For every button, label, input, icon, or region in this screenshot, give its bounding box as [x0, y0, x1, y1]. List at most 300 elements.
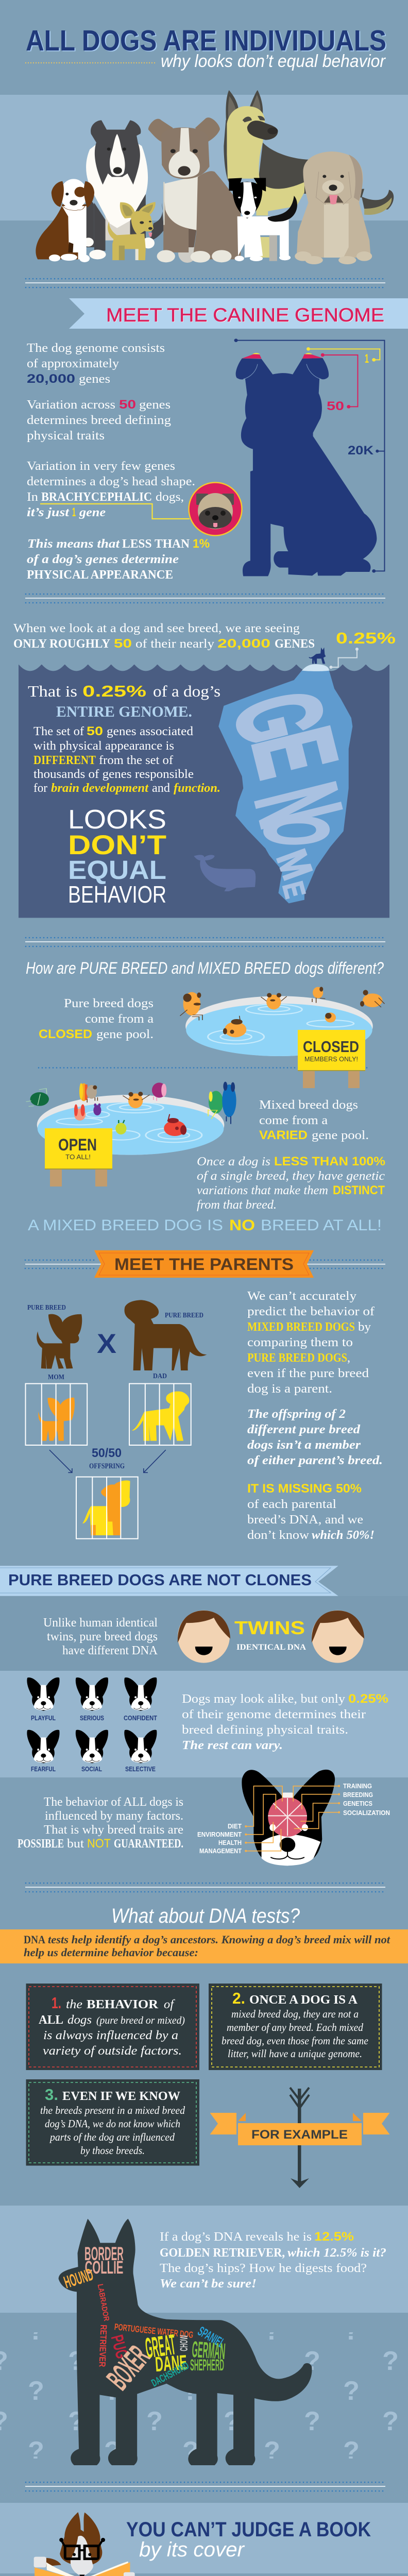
statement: no breed at all [28, 1217, 382, 1234]
background question marks: ? [382, 2406, 399, 2436]
icon: twin faces [27, 1611, 364, 1763]
text block: behavior influences: POSSIBLE [18, 1837, 64, 1851]
card 1: BEHAVIOR [87, 1998, 159, 2011]
card 1: the [66, 1998, 82, 2011]
text block: 12.5 percent: 12.5% [314, 2230, 354, 2244]
labels: factors: BREEDING [343, 1791, 373, 1799]
background question marks: ? [304, 2406, 320, 2436]
orange and tan dogs [79, 1083, 97, 1103]
text block: mixed breed: Once a dog is [197, 1155, 270, 1168]
text block: mixed breed: from that breed. [197, 1198, 277, 1212]
arrows [49, 1450, 166, 1472]
text block: less than 1 percent: 1% [193, 537, 210, 551]
text block: mixed breed: VARIED [259, 1128, 308, 1142]
band: dna intro: help us determine behavior because: [24, 1946, 198, 1959]
text block: less than 1 percent: of a dog’s genes determine [27, 553, 179, 566]
iceberg word: GENOME: E [276, 878, 312, 902]
background question marks: ? [264, 2376, 280, 2406]
text block: entire genome: function. [174, 782, 220, 795]
card 3: by those breeds. [80, 2144, 145, 2157]
text block: parents: even if the pure breed [247, 1367, 369, 1380]
breed word cloud: RETRIEVER [97, 2325, 109, 2367]
twin right [312, 1611, 364, 1663]
card 3: the breeds present in a mixed breed [40, 2104, 185, 2116]
labels: pure breed, mom, dad [27, 1304, 203, 1381]
heading: what about dna tests: What about DNA tests? [111, 1905, 300, 1927]
label: twins [234, 1617, 306, 1652]
labels: temperaments: FEARFUL [31, 1765, 56, 1773]
text block: behavior influences: GUARANTEED. [114, 1837, 183, 1851]
labels: temperaments: SERIOUS [80, 1714, 104, 1722]
text block: entire genome: 0.25% [82, 682, 146, 700]
text block: genome facts: genes [79, 372, 110, 386]
statement: no breed at all: NO [229, 1217, 255, 1234]
divider [25, 938, 386, 946]
card 1: (pure breed or mixed) [96, 2015, 185, 2026]
text block: entire genome: for [33, 782, 47, 795]
divider [25, 2482, 386, 2491]
labels: pure breed, mom, dad: PURE BREED [27, 1304, 66, 1312]
illustration: dog reading a book [34, 2512, 135, 2576]
cage: dad [129, 1384, 191, 1445]
cross sign: X [97, 1329, 116, 1359]
cage: offspring [76, 1477, 138, 1539]
dog: collie [83, 120, 164, 259]
iceberg word: GENOME: G [209, 680, 349, 754]
text block: closed pool: CLOSED [39, 1027, 92, 1041]
icon: small dog on iceberg [309, 648, 326, 664]
callout line: 0.25 [329, 648, 359, 669]
purple dog [93, 1104, 101, 1115]
sign: open to all: TO ALL! [65, 1153, 91, 1161]
text block: parents: IT IS MISSING 50% [247, 1482, 362, 1496]
text block: mixed breed: DISTINCT [333, 1183, 385, 1197]
background question marks: ? [68, 2406, 84, 2436]
heading: you can't judge a book [126, 2518, 371, 2561]
banner: meet the parents [94, 1250, 314, 1278]
text block: parents [247, 1290, 383, 1542]
divider segments beside banner [25, 1260, 386, 1268]
card 1: variety of outside factors. [43, 2044, 182, 2058]
dog tumbling [360, 990, 384, 1007]
label: 50/50 offspring: 50/50 [92, 1446, 122, 1460]
background question marks: ? [224, 2406, 240, 2436]
background question marks: ? [264, 2316, 280, 2346]
text block: only roughly 50: of their nearly [135, 637, 214, 651]
label: 50: 50 [327, 399, 344, 413]
silhouette: mom chihuahua [37, 1314, 82, 1369]
text block: genome facts: 1 [72, 505, 76, 519]
text block: only roughly 50: ONLY ROUGHLY [13, 637, 110, 651]
labels: temperaments: PLAYFUL [31, 1714, 56, 1722]
background question marks: ? [28, 2376, 44, 2406]
slogan: looks don't equal behavior: EQUAL [68, 855, 166, 885]
text block: genome facts: Variation across [27, 398, 115, 412]
background question marks: ? [182, 2376, 199, 2406]
breed word cloud: CHOW [178, 2335, 190, 2351]
panel: iceberg [19, 665, 389, 918]
background band: hero [0, 95, 408, 221]
illustration: open pool [26, 1082, 236, 1155]
text block: parents: dog is a parent. [247, 1382, 332, 1396]
text block: look alike: 0.25% [348, 1692, 388, 1706]
background question marks: ? [146, 2406, 163, 2436]
dotted rule [39, 1067, 369, 1069]
text block: genome facts: gene [79, 506, 106, 519]
sign: open to all [45, 1128, 112, 1187]
text block: closed pool [39, 997, 154, 1041]
text block: behavior influences: influenced by many factors. [45, 1809, 183, 1823]
text block: closed pool: gene pool. [96, 1028, 154, 1041]
labels: factors: SOCIALIZATION [343, 1809, 390, 1817]
breed word cloud: LABRADOR [96, 2283, 111, 2321]
breed word cloud: GERMAN [191, 2336, 226, 2364]
card 2: litter, will have a unique genome. [228, 2047, 362, 2060]
ribbon: for example: FOR EXAMPLE [251, 2128, 348, 2142]
icon: terrier head with brain [242, 1770, 340, 1866]
background band: book [0, 2503, 408, 2573]
breed word cloud: DACHSHUND [149, 2360, 191, 2389]
text block: genome facts: Variation in very few genes [27, 460, 175, 473]
illustration: mixed breed dog silhouette [59, 2219, 312, 2465]
text block: less than 1 percent [27, 537, 210, 582]
labels: pure breed, mom, dad: PURE BREED [165, 1312, 203, 1319]
label: 0.25 percent: 0.25% [336, 629, 396, 647]
card 3: EVEN IF WE KNOW [62, 2090, 180, 2103]
text block: parents: breed’s DNA, and we [247, 1513, 363, 1527]
labels: temperaments: SOCIAL [81, 1765, 102, 1773]
banner: meet the canine genome: MEET THE CANINE GENOME [107, 305, 385, 326]
text block: only roughly 50: 50 [114, 637, 132, 651]
labels: factors [197, 1782, 390, 1855]
text block: genome facts: genes [139, 398, 171, 412]
breed word cloud: COLLIE [85, 2258, 123, 2278]
heading: you can't judge a book: YOU CAN’T JUDGE A BOOK [126, 2518, 371, 2541]
green dog tumbling [26, 1089, 49, 1106]
text block: parents: PURE BREED DOGS [247, 1351, 347, 1365]
labels: factors: DIET [228, 1822, 242, 1830]
text block: entire genome: That is [28, 682, 77, 700]
text block: look alike: Dogs may look alike, but only [182, 1692, 345, 1706]
text block: entire genome: 50 [87, 724, 103, 738]
silhouette: dad [125, 1300, 207, 1370]
bracket: 20K [234, 338, 384, 573]
card 2 [209, 1984, 382, 2070]
breed word cloud: SPANIEL [195, 2324, 227, 2351]
text block: parents: of either parent’s breed. [247, 1454, 383, 1467]
text block: less than 1 percent: PHYSICAL APPEARANCE [27, 568, 173, 582]
sign: closed members only: CLOSED [303, 1038, 359, 1056]
divider [25, 1883, 386, 1892]
cage: mom [25, 1384, 87, 1445]
card 2: ONCE A DOG IS A [249, 1993, 358, 2007]
labels: pure breed, mom, dad: MOM [48, 1374, 64, 1381]
text block: less than 1 percent: LESS THAN [122, 537, 190, 551]
band: dna intro [0, 1929, 408, 1963]
text block: genome facts: determines breed defining [27, 414, 171, 427]
text block: entire genome: and [152, 782, 170, 795]
text block: genome facts: 50 [119, 398, 136, 412]
text block: closed pool: Pure breed dogs [64, 997, 154, 1010]
label: 50/50 offspring: OFFSPRING [89, 1462, 125, 1470]
breed word cloud: SHEPHERD [190, 2356, 224, 2375]
text block: less than 1 percent: This means that [27, 537, 120, 551]
label: twins: TWINS [234, 1617, 305, 1638]
breed word cloud: BORDER [84, 2244, 124, 2265]
card 1: dogs [67, 2013, 92, 2027]
text block: 12.5 percent: If a dog’s DNA reveals he is [160, 2230, 312, 2244]
label: 20K: 20K [348, 444, 374, 457]
background question marks: ? [182, 2316, 199, 2346]
background question marks: ? [104, 2376, 121, 2406]
pug silhouette with gene bracket chart [234, 338, 384, 576]
labels: factors: HEALTH [218, 1839, 242, 1846]
dog bobbing [325, 1012, 336, 1023]
statement: no breed at all: BREED AT ALL! [261, 1217, 382, 1234]
text block: parents: of each parental [247, 1498, 336, 1511]
label: 1: 1 [365, 352, 369, 366]
background question marks: ? [182, 2436, 199, 2466]
bracket: 50 [321, 353, 358, 409]
text block: entire genome: The set of [33, 725, 84, 738]
text block: look alike: The rest can vary. [182, 1739, 283, 1752]
text block: 12.5 percent [160, 2230, 386, 2291]
text block: twins: twins, pure breed dogs [47, 1630, 158, 1643]
text block: genome facts: it’s just [27, 506, 70, 519]
sign: closed members only: MEMBERS ONLY! [304, 1055, 358, 1063]
text block: mixed breed: gene pool. [312, 1129, 369, 1142]
callout line to pug [40, 504, 190, 519]
iceberg and whale [194, 671, 352, 903]
background question marks: ? [343, 2316, 360, 2346]
iceberg word: GENOME [209, 680, 365, 902]
banner: meet the canine genome [69, 298, 408, 329]
card 3: parts of the dog are influenced [49, 2131, 175, 2143]
breed word cloud: PORTUGUESE WATER DOG [114, 2323, 194, 2341]
text block: parents: MIXED BREED DOGS [247, 1320, 355, 1334]
text block: look alike: breed defining physical traits. [182, 1723, 348, 1737]
text block: only roughly 50 [13, 622, 315, 651]
card 1: of [164, 1998, 175, 2011]
terrier grid [27, 1677, 157, 1763]
dog: center pit mix [148, 117, 241, 263]
text block: closed pool: come from a [85, 1012, 154, 1026]
bracket: 1 [307, 347, 380, 362]
ribbon: for example [210, 2113, 389, 2145]
card 1: is always influenced by a [43, 2029, 178, 2042]
background question marks: ? [28, 2316, 44, 2346]
text block: parents: The offspring of 2 [247, 1408, 346, 1421]
card 1 [26, 1984, 199, 2070]
labels: factors: ENVIRONMENT [197, 1831, 242, 1838]
text block: genome facts: physical traits [27, 429, 105, 443]
background question marks: ? [104, 2316, 121, 2346]
text block: only roughly 50: 20,000 [217, 637, 270, 651]
text block: behavior influences: The behavior of ALL dogs is [44, 1795, 183, 1809]
text block: genome facts: BRACHYCEPHALIC [41, 490, 152, 504]
iceberg word: GENOME: N [231, 773, 365, 837]
text block: parents: predict the behavior of [247, 1305, 375, 1318]
dog on top rim [312, 987, 325, 1003]
text block: entire genome: of a dog’s [153, 682, 220, 700]
text block: entire genome: with physical appearance is [33, 739, 174, 753]
background question marks: ? [28, 2436, 44, 2466]
card 3: 3. [45, 2086, 58, 2104]
twin left [178, 1611, 230, 1663]
text block: behavior influences: That is why breed traits are [44, 1823, 183, 1837]
text block: parents: We can’t accurately [247, 1290, 356, 1303]
text block: 12.5 percent: The dog’s hips? How he digests food? [160, 2262, 367, 2275]
dog: german shepherd [224, 90, 394, 258]
text block: parents: don’t know [247, 1529, 310, 1542]
dog diving [223, 1016, 246, 1037]
text block: 12.5 percent: GOLDEN RETRIEVER, [160, 2246, 285, 2260]
text block: look alike: of their genome determines their [182, 1708, 366, 1721]
text block: parents: comparing them to [247, 1336, 353, 1349]
text block: twins [43, 1616, 158, 1657]
background question marks: ? [104, 2436, 121, 2466]
slogan: looks don't equal behavior: BEHAVIOR [68, 881, 166, 908]
text block: parents: dogs isn’t a member [247, 1438, 361, 1452]
text block: parents: , [347, 1351, 350, 1365]
arrow: for example [290, 2088, 309, 2188]
breed word cloud: HOUND [61, 2264, 96, 2292]
card 1: ALL [39, 2013, 63, 2027]
card 3: dog’s DNA, we do not know which [45, 2117, 180, 2130]
lime dog [115, 1120, 126, 1134]
text block: genome facts: determines a dog’s head shape. [27, 475, 195, 488]
text block: 12.5 percent: which 12.5% is it? [287, 2246, 386, 2260]
statement: no breed at all: A MIXED BREED DOG IS [28, 1217, 223, 1234]
card 3 [26, 2079, 199, 2166]
illustration: closed pool [180, 987, 384, 1056]
background band: terrier faces [0, 1671, 408, 1777]
dog: small spaniel [36, 179, 94, 262]
breed word cloud: DANE [155, 2350, 188, 2376]
background band: mixed dog [0, 2206, 408, 2313]
banner: pure breed dogs are not clones [0, 1566, 338, 1596]
labels: temperaments: CONFIDENT [124, 1714, 157, 1722]
label: 50/50 offspring [89, 1446, 125, 1470]
iceberg word: GENOME: E [229, 717, 360, 787]
banner: meet the canine genome: MEET THE CANINE GENOME [106, 304, 384, 326]
punnett illustration [25, 1300, 207, 1539]
text block: entire genome: thousands of genes responsible [33, 768, 194, 781]
hero dogs illustration [36, 90, 394, 264]
background question marks: ? [146, 2346, 163, 2376]
red dog [164, 1114, 186, 1136]
card 2: 2. [232, 1989, 245, 2007]
text block: mixed breed [197, 1098, 385, 1212]
divider [25, 594, 386, 603]
text block: behavior influences: NOT [87, 1837, 111, 1851]
labels: pure breed, mom, dad: DAD [153, 1372, 167, 1380]
labels: temperaments: SELECTIVE [125, 1765, 156, 1773]
water line scallops [19, 648, 389, 671]
text block: entire genome: ENTIRE GENOME. [56, 703, 192, 720]
breed word cloud [61, 2244, 227, 2397]
text block: parents: which 50%! [312, 1529, 375, 1542]
text block: only roughly 50: GENES [275, 637, 315, 651]
text block: entire genome: DIFFERENT [33, 754, 96, 767]
text block: 12.5 percent: We can’t be sure! [160, 2277, 257, 2291]
yellow-orange swimmer [123, 1092, 149, 1108]
labels: factors: TRAINING [343, 1782, 372, 1790]
labels: temperaments [31, 1714, 157, 1773]
card 2: mixed breed dog, they are not a [231, 2008, 359, 2020]
text block: look alike [182, 1692, 388, 1752]
text block: parents: different pure breed [247, 1423, 361, 1436]
iceberg word: GENOME: M [267, 844, 321, 886]
text block: genome facts: dogs, [156, 490, 184, 504]
banner: pure breed dogs are not clones: PURE BREED DOGS ARE NOT CLONES [8, 1571, 312, 1589]
iceberg word: GENOME: O [246, 814, 346, 848]
sign: closed members only [298, 1030, 365, 1088]
text block: behavior influences [18, 1795, 183, 1851]
text block: mixed breed: variations that make them [197, 1184, 328, 1197]
breed word cloud: GREAT [143, 2328, 177, 2364]
breed word cloud: PUG [107, 2333, 132, 2361]
label: twins: IDENTICAL DNA [236, 1643, 306, 1652]
text block: genome facts: of approximately [27, 357, 119, 370]
text block: genome facts: 20,000 [27, 372, 75, 386]
text block: mixed breed: of a single breed, they have genetic [197, 1170, 385, 1183]
card 2: breed dog, even those from the same [222, 2035, 368, 2047]
background question marks: ? [343, 2436, 360, 2466]
text block: only roughly 50: When we look at a dog and see breed, we are seeing [13, 622, 300, 635]
slogan: looks don't equal behavior: DON’T [68, 830, 166, 860]
sign: open to all: OPEN [58, 1136, 97, 1154]
text block: twins: have different DNA [62, 1644, 158, 1657]
text block: mixed breed: come from a [259, 1114, 328, 1127]
background question marks: ? [382, 2346, 399, 2376]
text block: genome facts: In [27, 490, 38, 504]
icon: pug in circle [189, 482, 242, 536]
dog on the rim [180, 992, 202, 1021]
dog: jack russell [229, 178, 297, 261]
slogan: looks don't equal behavior [68, 805, 166, 908]
background question marks: ? [224, 2346, 240, 2376]
text block: genome facts [27, 342, 195, 519]
card 2: member of any breed. Each mixed [227, 2021, 363, 2033]
pink dog [152, 1082, 166, 1101]
coral dog [74, 1104, 86, 1121]
ear tips [242, 353, 322, 359]
text block: entire genome: brain development [51, 782, 149, 795]
text block: entire genome: genes associated [107, 725, 193, 738]
iceberg [218, 671, 352, 903]
blue and green dogs [208, 1082, 236, 1124]
whale [194, 855, 256, 891]
band: dna intro: tests help identify a dog’s ancestors. Knowing a dog’s breed mix will not [48, 1933, 390, 1946]
background question marks: ? [343, 2376, 360, 2406]
background question marks: ? [264, 2436, 280, 2466]
dog swimming [261, 993, 287, 1009]
dog: shaggy terrier [295, 151, 372, 264]
text block: behavior influences: but [67, 1837, 84, 1851]
text block: entire genome: from the set of [99, 754, 173, 767]
text block: twins: Unlike human identical [43, 1616, 158, 1630]
divider [25, 279, 386, 287]
subtitle: why looks don’t equal behavior [161, 52, 386, 71]
background band: twins darker [0, 1596, 408, 1671]
slogan: looks don't equal behavior: LOOKS [68, 805, 166, 835]
breed word cloud: BOXER [100, 2340, 157, 2397]
banner: meet the parents: MEET THE PARENTS [114, 1255, 294, 1274]
text block: genome facts: The dog genome consists [27, 342, 165, 355]
silhouette [236, 358, 377, 576]
text block: entire genome [28, 682, 220, 795]
